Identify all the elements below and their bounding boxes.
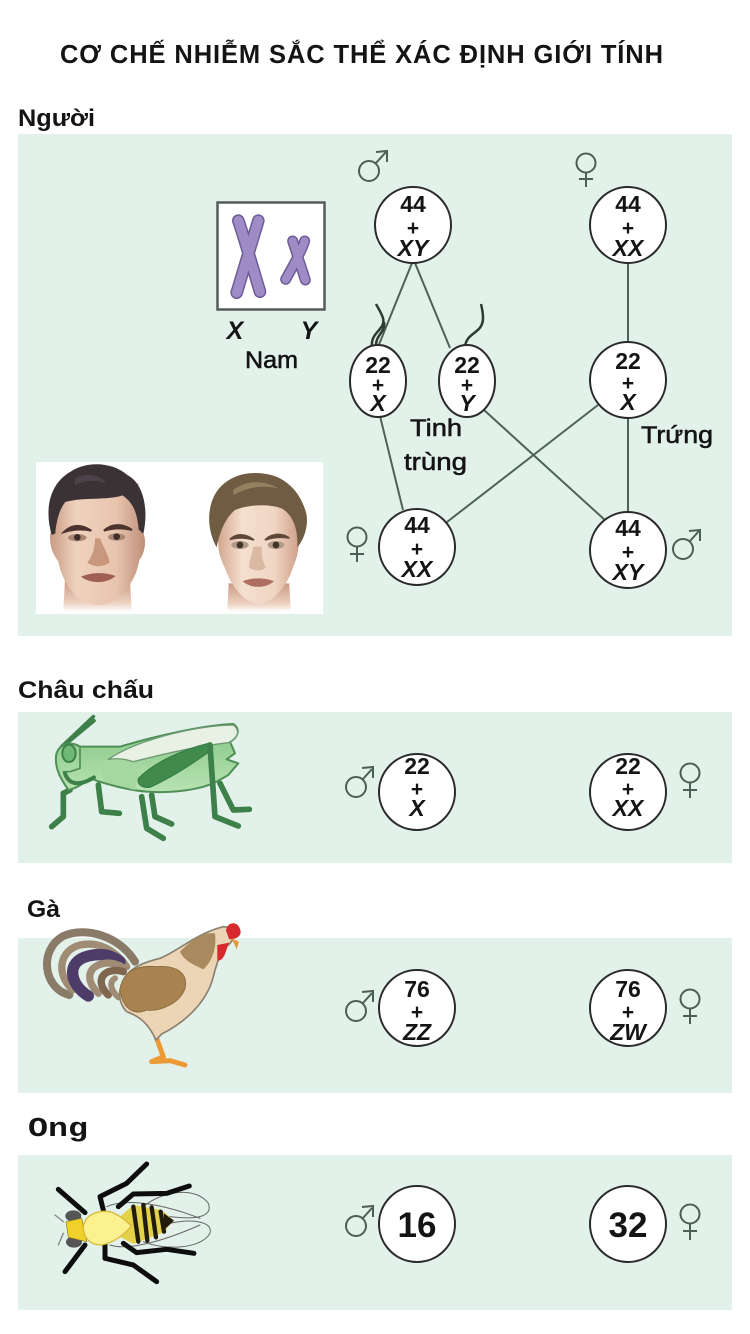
- cell: 22 + X: +: [411, 778, 423, 801]
- offspring cell: 44 + XY: 44: [615, 515, 641, 541]
- mother cell: 44 + XX: +: [622, 217, 634, 240]
- icon: male symbol: [346, 767, 373, 797]
- sperm cell: 22 + Y: [439, 345, 495, 417]
- cell: 16: [379, 1186, 455, 1262]
- title: CƠ CHẾ NHIỄM SẮC THỂ XÁC ĐỊNH GIỚI TÍNH: [60, 39, 663, 69]
- cell: 22 + XX: [590, 753, 666, 830]
- mother cell: 44 + XX: 44: [615, 191, 641, 217]
- egg cell: 22 + X: 22: [615, 348, 641, 374]
- offspring cell: 44 + XX: 44: [404, 512, 430, 538]
- heading: Châu chấu: Châu chấu: [18, 677, 154, 704]
- cell: 76 + ZW: [590, 970, 666, 1046]
- cell: 22 + X: [379, 753, 455, 830]
- cell: 76 + ZW: 76: [615, 976, 641, 1002]
- cell: 76 + ZZ: +: [411, 1001, 423, 1024]
- cell: 22 + XX: 22: [615, 753, 641, 779]
- sperm cell: 22 + X: X: [368, 390, 387, 416]
- icon: female symbol: [680, 990, 700, 1024]
- sperm cell: 22 + Y: Y: [459, 390, 477, 416]
- sperm cell: 22 + X: [350, 345, 406, 417]
- father cell: 44 + XY: [375, 187, 451, 263]
- offspring cell: 44 + XY: XY: [611, 559, 646, 585]
- cell: 22 + X: X: [407, 795, 426, 821]
- icon: male symbol parent: [359, 151, 387, 181]
- heading: Người: Người: [18, 105, 95, 132]
- sperm cell: 22 + Y: +: [461, 374, 473, 397]
- cell: 76 + ZZ: ZZ: [402, 1019, 432, 1045]
- cell: 76 + ZW: +: [622, 1001, 634, 1024]
- icon: male symbol: [346, 1206, 373, 1236]
- icon: woman's face: [209, 473, 307, 612]
- heading: Ong: Ong: [28, 1115, 88, 1145]
- panel: human: [18, 134, 732, 636]
- mother cell: 44 + XX: [590, 187, 666, 263]
- icon: man's face: [48, 464, 145, 612]
- icon: male symbol: [346, 991, 373, 1021]
- offspring cell: 44 + XY: +: [622, 541, 634, 564]
- icon: female symbol parent: [576, 154, 596, 187]
- label: Tinh trùng: Tinh: [410, 415, 462, 442]
- portrait image: man and woman: [36, 462, 323, 614]
- icon: female symbol offspring: [348, 528, 366, 562]
- cell: 32: [590, 1186, 666, 1262]
- cell: 32: 32: [609, 1206, 647, 1245]
- label: Tinh trùng: trùng: [404, 449, 467, 476]
- offspring cell: 44 + XY: [590, 512, 666, 588]
- father cell: 44 + XY: 44: [400, 191, 426, 217]
- egg cell: 22 + X: +: [622, 372, 634, 395]
- cell: 76 + ZW: ZW: [609, 1019, 648, 1045]
- label: X: X: [225, 317, 245, 345]
- label: Tinh trùng: [404, 415, 467, 476]
- cell: 16: 16: [398, 1206, 436, 1245]
- panel: chicken: [18, 923, 732, 1093]
- cell: 22 + XX: XX: [611, 795, 645, 821]
- icon: bee: [55, 1164, 210, 1282]
- cell: 76 + ZZ: 76: [404, 976, 430, 1002]
- egg cell: 22 + X: X: [618, 389, 637, 415]
- icon: female symbol: [680, 764, 700, 798]
- label: Y: Y: [301, 317, 320, 345]
- father cell: 44 + XY: XY: [396, 235, 431, 261]
- egg cell: 22 + X: [590, 342, 666, 418]
- sperm cell: 22 + X: +: [372, 374, 384, 397]
- icon: grasshopper: [52, 717, 249, 838]
- icon: rooster: [47, 923, 241, 1065]
- heading: Gà: Gà: [27, 896, 61, 923]
- offspring cell: 44 + XX: XX: [400, 556, 434, 582]
- cell: 22 + X: 22: [404, 753, 430, 779]
- panel: grasshopper: [18, 712, 732, 863]
- icon: male symbol offspring: [673, 530, 700, 559]
- cell: 76 + ZZ: [379, 970, 455, 1046]
- sperm cell: 22 + Y: 22: [454, 352, 480, 378]
- father cell: 44 + XY: +: [407, 217, 419, 240]
- connecting lines of the cross: [378, 263, 628, 522]
- panel: bee: [18, 1155, 732, 1310]
- chromosome box: [218, 202, 324, 374]
- offspring cell: 44 + XX: +: [411, 538, 423, 561]
- offspring cell: 44 + XX: [379, 509, 455, 585]
- icon: female symbol: [680, 1204, 700, 1240]
- label: Nam: Nam: [245, 347, 298, 374]
- sperm tails: [372, 304, 483, 347]
- mother cell: 44 + XX: XX: [611, 235, 645, 261]
- sperm cell: 22 + X: 22: [365, 352, 391, 378]
- label: Trứng: Trứng: [641, 422, 713, 449]
- cell: 22 + XX: +: [622, 778, 634, 801]
